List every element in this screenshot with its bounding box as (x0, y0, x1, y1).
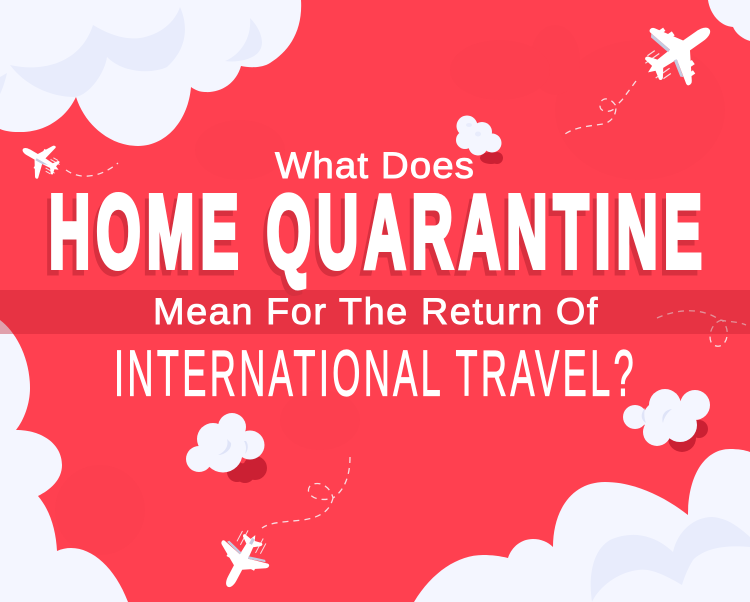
title line: What Does: What Does (275, 145, 475, 186)
flight path: bottom (262, 457, 350, 528)
plane: top right (628, 1, 729, 100)
cloud: small top centre (456, 116, 503, 164)
cloud: middle right (623, 389, 710, 452)
plane: left (13, 133, 68, 186)
cloud: top left (0, 0, 301, 146)
cloud: bottom right (414, 449, 750, 602)
flight path: left (66, 163, 118, 176)
plane: bottom (204, 522, 279, 599)
band behind subtitle (0, 290, 750, 334)
cloud: bottom left (0, 320, 128, 602)
flight path: top right (565, 81, 636, 134)
flight path: right (657, 311, 746, 346)
cloud: top right (708, 0, 750, 41)
title line: Mean For The Return Of: Mean For The Return Of (153, 291, 599, 332)
cloud: middle left (186, 413, 267, 483)
